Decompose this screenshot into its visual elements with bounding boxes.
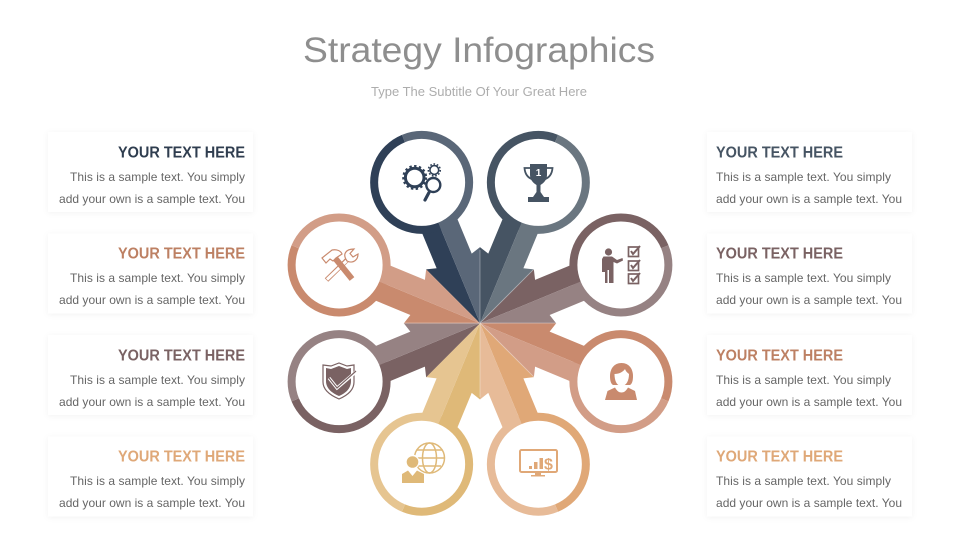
arrow and ring: left upper xyxy=(272,198,500,371)
panel: left card 1: add your own is a sample text. You xyxy=(59,192,245,206)
arrow and ring: bottom right xyxy=(432,304,606,531)
icon: trophy: 1 xyxy=(536,168,542,179)
panel: right card 4 xyxy=(707,436,912,516)
subtitle: Type The Subtitle Of Your Great Here xyxy=(371,84,587,99)
icon: gears and magnifier xyxy=(403,164,440,200)
panel: left card 1: This is a sample text. You simply xyxy=(70,170,245,184)
icon: person and globe xyxy=(402,443,444,483)
panel: right card 3 xyxy=(707,335,912,415)
panel: left card 2: add your own is a sample text. You xyxy=(59,293,245,307)
panel: right card 4: This is a sample text. You simply xyxy=(716,474,891,488)
panel: right card 1 xyxy=(707,132,912,212)
panel: left card 1 xyxy=(48,132,253,212)
panel: left card 3 xyxy=(48,335,253,415)
panel: right card 2: YOUR TEXT HERE xyxy=(716,246,843,262)
panel: left card 2: This is a sample text. You simply xyxy=(70,271,245,285)
panel: right card 2 xyxy=(707,234,912,314)
title: Strategy Infographics xyxy=(303,31,655,70)
icon: hammer and wrench xyxy=(322,249,358,280)
panel: left card 4: YOUR TEXT HERE xyxy=(118,448,245,466)
panel: left card 4: This is a sample text. You simply xyxy=(70,474,245,488)
icon: woman xyxy=(605,363,637,400)
panel: right card 1: YOUR TEXT HERE xyxy=(716,144,843,162)
icon: monitor with chart xyxy=(520,450,557,476)
panel: right card 4: YOUR TEXT HERE xyxy=(716,448,843,466)
panel: left card 4 xyxy=(48,436,253,516)
icon: monitor with chart: $ xyxy=(544,456,553,474)
panel: right card 4: add your own is a sample text. You xyxy=(716,496,902,510)
arrow and ring: left lower xyxy=(272,276,500,449)
panel: right card 1: add your own is a sample text. You xyxy=(716,192,902,206)
panel: right card 2: add your own is a sample text. You xyxy=(716,293,902,307)
panel: left card 3: add your own is a sample text. You xyxy=(59,395,245,409)
icon: trophy xyxy=(524,164,552,202)
panel: left card 3: This is a sample text. You simply xyxy=(70,373,245,387)
icon: presenter and checklist xyxy=(602,246,640,284)
panel: left card 2 xyxy=(48,234,253,314)
panel: left card 4: add your own is a sample text. You xyxy=(59,496,245,510)
panel: right card 3: This is a sample text. You simply xyxy=(716,373,891,387)
arrow and ring: bottom left xyxy=(354,304,528,531)
panel: right card 3: add your own is a sample text. You xyxy=(716,395,902,409)
panel: right card 3: YOUR TEXT HERE xyxy=(716,348,843,364)
arrow and ring: right upper xyxy=(460,198,688,371)
arrow and ring: top right xyxy=(432,115,606,343)
panel: left card 1: YOUR TEXT HERE xyxy=(118,144,245,162)
panel: right card 2: This is a sample text. You simply xyxy=(716,271,891,285)
panel: left card 3: YOUR TEXT HERE xyxy=(118,348,245,364)
arrow and ring: top left xyxy=(354,115,528,343)
arrow and ring: right lower xyxy=(460,276,688,449)
panel: left card 2: YOUR TEXT HERE xyxy=(118,246,245,262)
panel: right card 1: This is a sample text. You simply xyxy=(716,170,891,184)
icon: shield with check xyxy=(323,363,357,399)
